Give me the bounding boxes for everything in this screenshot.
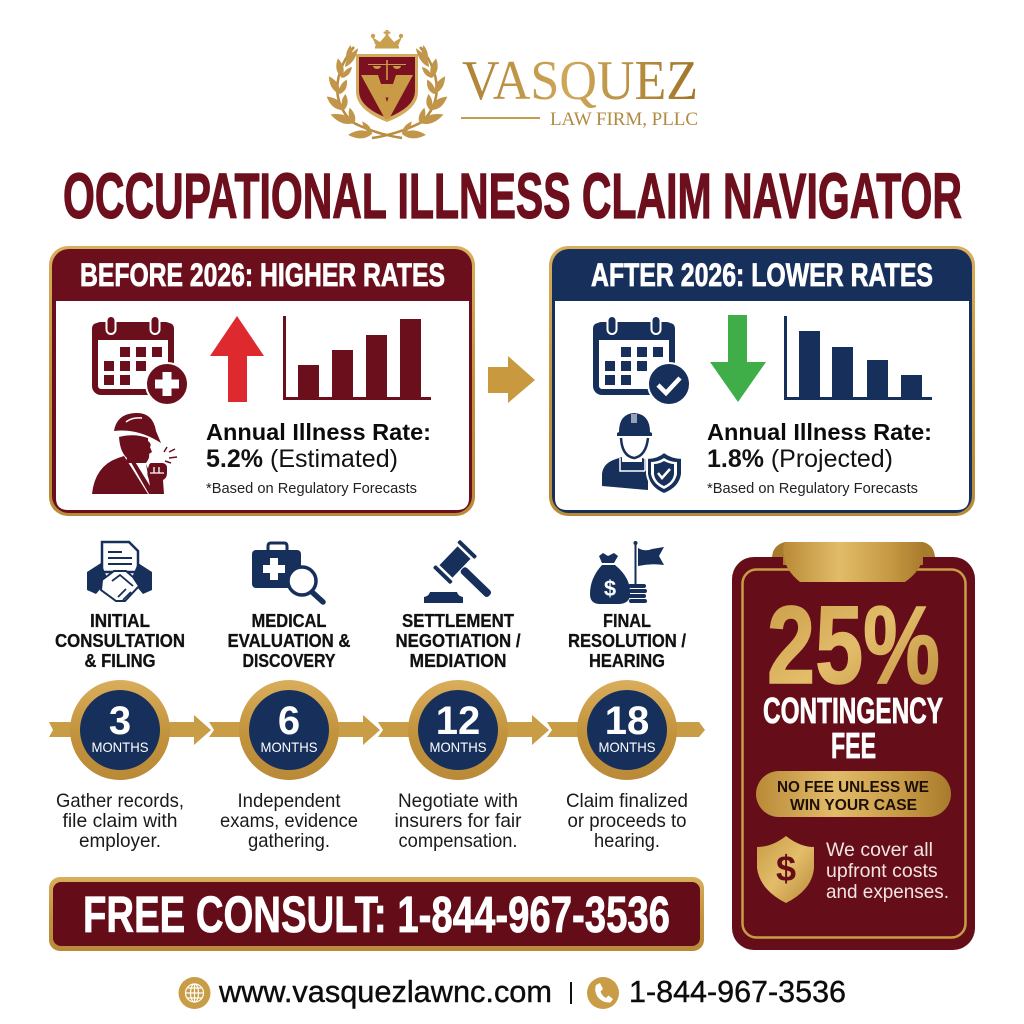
icon: handshake and document: [87, 542, 152, 601]
step 4 label: HEARING: [589, 651, 665, 671]
icon: gavel: [424, 540, 503, 609]
panel: after 2026: [549, 246, 975, 516]
step 4 label: [568, 611, 686, 671]
icon: shield: [356, 54, 418, 122]
stat: annual illness rate: Annual Illness Rate:: [707, 419, 932, 445]
icon: red up arrow: [210, 316, 264, 402]
step 1 label: [55, 611, 185, 671]
stat value: 1.8% (Projected): [707, 445, 893, 473]
step 2 label: EVALUATION &: [228, 631, 351, 651]
step 4 label: FINAL: [603, 611, 651, 631]
step 3 description: insurers for fair: [394, 810, 522, 832]
step 2 description: exams, evidence: [220, 810, 358, 832]
step 3 description: Negotiate with: [398, 790, 518, 812]
logo wordmark: VASQUEZ: [462, 50, 698, 112]
step 3 description: [394, 790, 522, 852]
icon: calendar plus: [92, 316, 188, 405]
contingency heading: CONTINGENCY: [763, 690, 943, 731]
node: 12 months: 12: [436, 699, 480, 743]
footnote: *Based on Regulatory Forecasts: [707, 481, 918, 497]
gold pill: [756, 771, 951, 817]
step descriptions: [56, 790, 688, 852]
icon: green down arrow: [710, 315, 766, 402]
icon: coughing worker: [92, 413, 177, 494]
big percentage: 25%: [767, 584, 940, 707]
node: 3 months: MONTHS: [92, 739, 148, 755]
step 2 label: [228, 611, 351, 671]
node: 6 months: 6: [278, 699, 300, 743]
icon: laurel wreath: [324, 45, 450, 139]
icon: calendar check: [593, 316, 690, 405]
step 1 description: [56, 790, 184, 852]
stat value: 5.2% (Estimated): [206, 445, 398, 473]
contingency heading: [763, 690, 943, 766]
covered costs text: and expenses.: [826, 881, 949, 903]
heading: after: AFTER 2026: LOWER RATES: [591, 257, 933, 293]
icon: money bag and flag: $: [604, 576, 616, 601]
node: 18 months: [577, 680, 677, 780]
icon: globe: [178, 977, 210, 1009]
timeline: [49, 680, 705, 780]
step 2 description: Independent: [238, 790, 341, 812]
bar chart: rising: [283, 316, 431, 400]
icon: protected worker: [602, 413, 682, 494]
footer contact: [178, 974, 846, 1009]
node: 18 months: 18: [605, 699, 649, 743]
phone number: 1-844-967-3536: [629, 974, 846, 1009]
step 2 description: gathering.: [248, 830, 330, 852]
step 1 description: file claim with: [62, 810, 178, 832]
step 2 label: DISCOVERY: [242, 651, 336, 671]
step 4 description: or proceeds to: [568, 810, 687, 832]
call to action banner: [49, 877, 704, 951]
step labels: [55, 611, 686, 671]
step 4 description: Claim finalized: [566, 790, 688, 812]
icon: crown: [371, 30, 403, 48]
footnote: *Based on Regulatory Forecasts: [206, 481, 417, 497]
logo: [324, 30, 698, 139]
website: www.vasquezlawnc.com: [218, 974, 552, 1009]
covered costs text: We cover all: [826, 839, 933, 861]
step 3 label: NEGOTIATION /: [396, 631, 520, 651]
panel: before 2026: [49, 246, 475, 516]
step 2 description: [220, 790, 358, 852]
node: 12 months: [408, 680, 508, 780]
covered costs text: upfront costs: [826, 860, 938, 882]
heading: before: BEFORE 2026: HIGHER RATES: [80, 257, 445, 293]
gold ribbon: [772, 542, 935, 582]
step 4 description: [566, 790, 688, 852]
step 4 label: RESOLUTION /: [568, 631, 686, 651]
icon: phone: [587, 977, 619, 1009]
node: 18 months: MONTHS: [598, 739, 656, 755]
step 3 label: MEDIATION: [410, 651, 506, 671]
step 1 description: Gather records,: [56, 790, 184, 812]
icon: money bag and flag: [590, 541, 664, 604]
step 2 label: MEDICAL: [252, 611, 326, 631]
node: 6 months: MONTHS: [260, 739, 318, 755]
arrow ribbon segments: [49, 715, 705, 745]
covered costs text: [826, 839, 949, 903]
step 3 label: SETTLEMENT: [402, 611, 514, 631]
step 1 label: & FILING: [84, 651, 156, 671]
step 1 description: employer.: [79, 830, 161, 852]
gold pill: NO FEE UNLESS WE: [777, 779, 929, 796]
node: 12 months: MONTHS: [430, 739, 486, 755]
logo subtitle: LAW FIRM, PLLC: [550, 109, 698, 130]
call to action banner: FREE CONSULT: 1-844-967-3536: [83, 886, 670, 943]
panel: contingency fee: [732, 542, 975, 950]
contingency heading: FEE: [831, 725, 876, 766]
gold pill: WIN YOUR CASE: [790, 797, 917, 814]
step 3 label: [396, 611, 520, 671]
stat: annual illness rate: Annual Illness Rate:: [206, 419, 431, 445]
step 4 description: hearing.: [594, 830, 660, 852]
node: 3 months: [70, 680, 170, 780]
step 3 description: compensation.: [398, 830, 518, 852]
step 1 label: INITIAL: [90, 611, 150, 631]
node: 6 months: [239, 680, 339, 780]
icon: dollar shield: $: [776, 848, 796, 889]
node: 3 months: 3: [109, 699, 131, 743]
bar chart: falling: [784, 316, 932, 400]
icon: medical bag and magnifier: [252, 543, 323, 602]
arrow: before to after: [488, 356, 535, 403]
step 1 label: CONSULTATION: [55, 631, 185, 651]
icon: dollar shield: [757, 836, 814, 903]
